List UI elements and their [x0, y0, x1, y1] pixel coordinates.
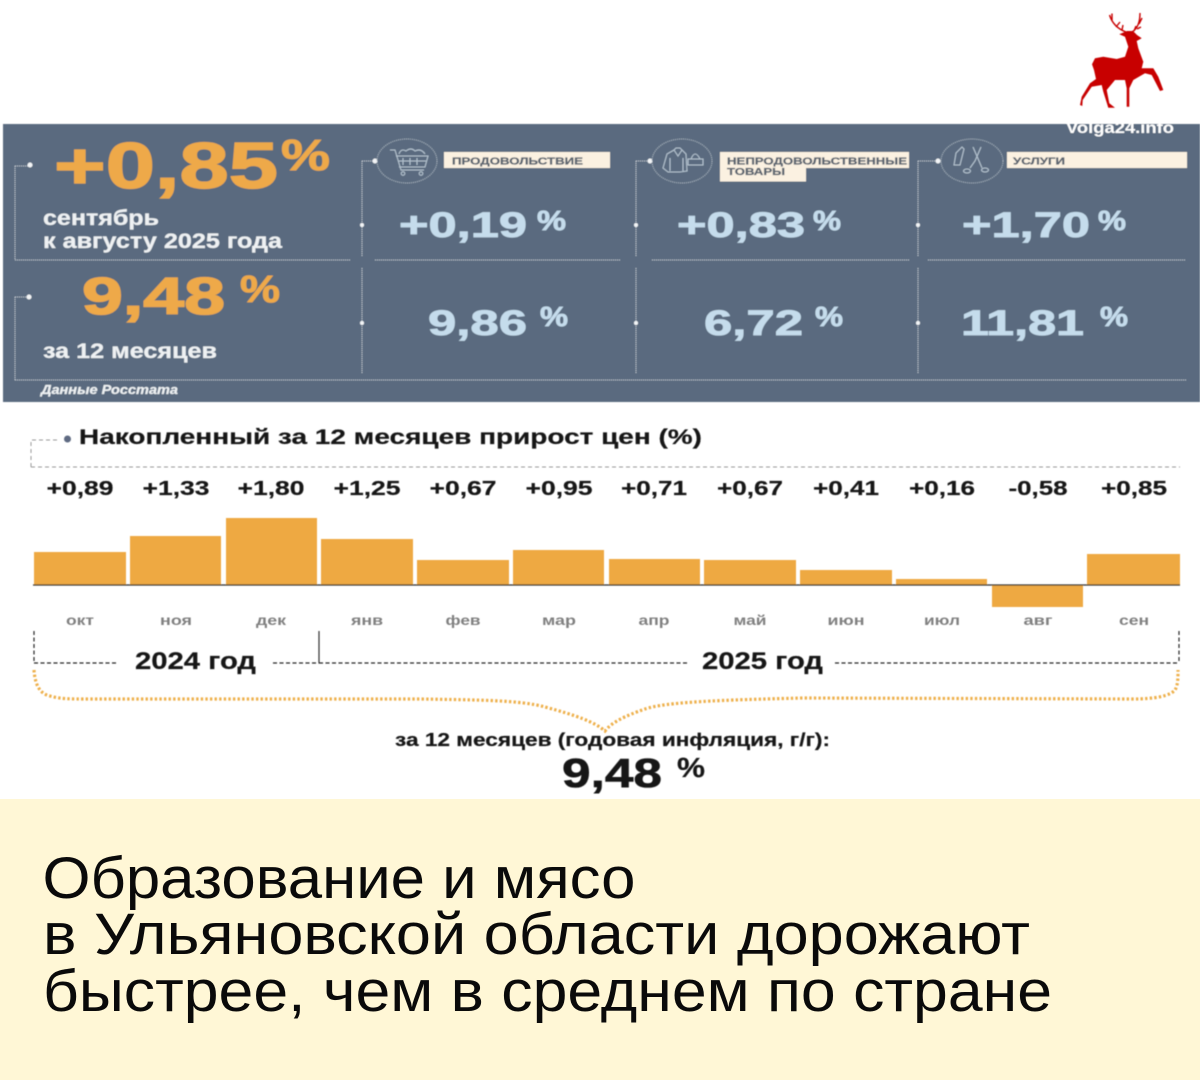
month labels: июл	[924, 612, 960, 628]
bar chart: monthly price growth	[33, 478, 1180, 628]
source note: Данные Росстата	[40, 382, 178, 397]
month labels: окт	[66, 612, 94, 628]
brace	[34, 670, 1178, 731]
bar value labels: -0,58	[1008, 478, 1068, 500]
bar value labels: +0,89	[46, 478, 114, 500]
month labels: июн	[828, 612, 864, 628]
year axis: 2024 год	[135, 648, 256, 675]
non-food values	[677, 205, 843, 343]
bar value labels: +0,71	[621, 478, 687, 500]
month labels: мар	[542, 612, 576, 628]
headline annual value: %	[240, 269, 280, 311]
services values: %	[1098, 205, 1126, 236]
bar value labels: +0,67	[430, 478, 496, 500]
headline text	[42, 846, 1052, 1024]
monthly caption: сентябрь	[43, 207, 159, 230]
services values: %	[1100, 301, 1128, 332]
monthly caption: к августу 2025 года	[43, 230, 282, 253]
bar value labels: +0,85	[1101, 478, 1167, 500]
month labels: авг	[1024, 612, 1053, 628]
tag: food: ПРОДОВОЛЬСТВИЕ	[452, 156, 583, 168]
year axis: 2025 год	[702, 648, 823, 675]
tag: non-food goods: НЕПРОДОВОЛЬСТВЕННЫЕ	[727, 156, 907, 168]
headline monthly value: +0,85	[54, 129, 278, 202]
services values: +1,70	[962, 206, 1090, 245]
month labels: сен	[1119, 612, 1149, 628]
month labels: дек	[256, 612, 287, 628]
bar value labels: +1,33	[142, 478, 210, 500]
annual inflation value: %	[677, 752, 705, 783]
month labels: май	[734, 612, 766, 628]
watermark: Volga24.info	[1066, 120, 1174, 137]
food values: %	[537, 205, 566, 236]
icon: comb and scissors	[941, 139, 1003, 183]
chart heading: Накопленный за 12 месяцев прирост цен (%)	[79, 426, 702, 449]
food values: +0,19	[399, 206, 527, 245]
year axis	[34, 631, 1179, 675]
headline annual value	[82, 268, 280, 326]
food values: %	[540, 301, 568, 332]
monthly caption	[43, 207, 282, 253]
panel: inflation summary	[3, 124, 1200, 402]
headline annual value: 9,48	[82, 268, 225, 326]
bar value labels	[46, 478, 1167, 500]
headline band	[0, 799, 1200, 1080]
headline monthly value	[54, 129, 330, 202]
tag: non-food goods: ТОВАРЫ	[727, 166, 785, 178]
bar value labels: +0,67	[717, 478, 783, 500]
headline text: быстрее, чем в среднем по стране	[43, 959, 1052, 1024]
tag: services	[1007, 152, 1187, 168]
month labels: ноя	[160, 612, 192, 628]
icon: clothes and bag	[652, 139, 712, 183]
headline text: в Ульяновской области дорожают	[43, 902, 1030, 967]
month labels: янв	[351, 612, 383, 628]
tag: non-food goods	[720, 152, 909, 182]
month labels: апр	[638, 612, 670, 628]
food values: 9,86	[428, 304, 527, 343]
bars	[34, 518, 1180, 607]
non-food values: %	[813, 205, 841, 236]
services values: 11,81	[961, 304, 1084, 343]
annual caption: за 12 месяцев	[43, 340, 217, 363]
annual inflation caption: за 12 месяцев (годовая инфляция, г/г):	[395, 730, 830, 750]
bar value labels: +0,95	[526, 478, 592, 500]
month labels	[66, 612, 1149, 628]
non-food values: %	[815, 301, 843, 332]
tag: food	[444, 152, 610, 168]
tag: services: УСЛУГИ	[1013, 156, 1065, 168]
chart heading	[31, 426, 1180, 467]
food values	[399, 205, 568, 343]
bar value labels: +1,25	[334, 478, 400, 500]
non-food values: +0,83	[677, 206, 805, 245]
month labels: фев	[446, 612, 481, 628]
non-food values: 6,72	[704, 304, 803, 343]
services values	[961, 205, 1128, 343]
annual inflation value	[562, 750, 705, 796]
annual inflation value: 9,48	[562, 750, 662, 796]
icon: red deer logo	[1080, 13, 1163, 108]
headline monthly value: %	[281, 131, 330, 180]
bar value labels: +1,80	[238, 478, 304, 500]
headline text: Образование и мясо	[42, 846, 636, 911]
bar value labels: +0,16	[909, 478, 975, 500]
icon: shopping cart	[377, 139, 437, 183]
bar value labels: +0,41	[813, 478, 879, 500]
